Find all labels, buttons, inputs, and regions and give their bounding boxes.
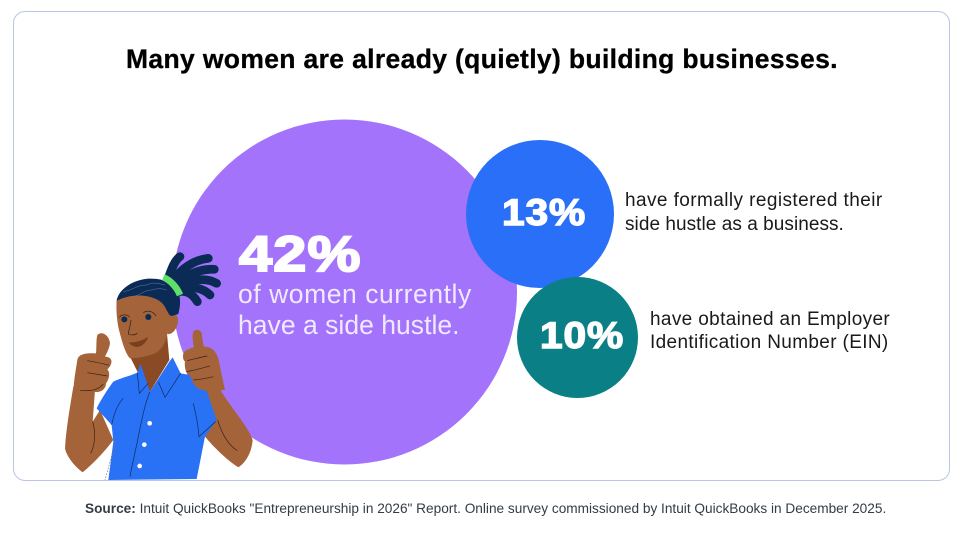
circle: 13% blue xyxy=(466,140,614,288)
stat: 13%: 13% xyxy=(502,192,586,233)
text: 42% description: have a side hustle. xyxy=(238,310,460,340)
face xyxy=(116,294,170,358)
text: 10% description xyxy=(650,309,890,353)
title: Many women are already (quietly) building businesses. xyxy=(126,44,838,74)
eyes xyxy=(121,316,127,322)
circle: 10% teal xyxy=(517,277,638,398)
hair strands xyxy=(123,283,167,297)
circle: 42% purple xyxy=(172,120,517,464)
source note: Source: Intuit QuickBooks "Entrepreneurship in 2026" Report. Online survey commissioned by Intuit QuickBooks in December 2025. xyxy=(85,501,886,516)
hair xyxy=(117,279,180,316)
neck xyxy=(130,330,169,392)
buttons xyxy=(147,421,152,426)
right arm xyxy=(193,387,253,467)
text: 13% description: have formally registered their xyxy=(625,190,883,211)
text: 10% description: Identification Number (EIN) xyxy=(650,332,889,353)
shirt lines xyxy=(112,373,216,477)
text: 42% description xyxy=(238,279,472,340)
text: 13% description: side hustle as a business. xyxy=(625,214,844,235)
shirt xyxy=(97,357,217,480)
mouth xyxy=(128,337,148,347)
finger lines xyxy=(80,356,213,391)
hair ponytail xyxy=(168,257,217,302)
right hand xyxy=(183,330,225,392)
text: 42% description: of women currently xyxy=(238,279,472,309)
stat: 42%: 42% xyxy=(239,226,362,282)
arm lines xyxy=(91,420,237,453)
ear xyxy=(167,314,178,334)
left arm xyxy=(65,387,113,472)
text: 13% description xyxy=(625,190,883,235)
dashed seam xyxy=(105,442,116,480)
left hand xyxy=(73,333,111,392)
face lines xyxy=(119,311,156,335)
text: 10% description: have obtained an Employer xyxy=(650,309,890,330)
hair band xyxy=(163,277,180,295)
stat: 10%: 10% xyxy=(540,315,624,356)
